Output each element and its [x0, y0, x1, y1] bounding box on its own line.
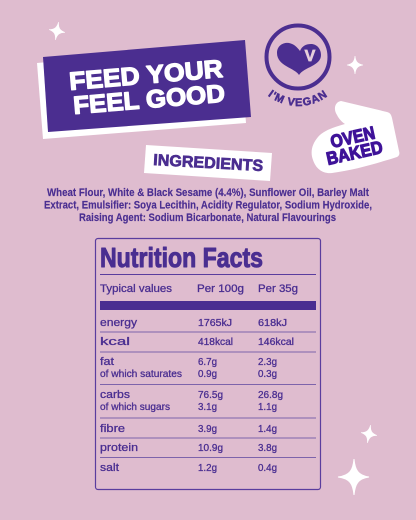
- row: carbs: 1.1g: [258, 402, 277, 413]
- headline text: FEED YOUR: [68, 55, 224, 96]
- header bar: [100, 301, 316, 310]
- ingredients list: [44, 187, 372, 224]
- headline text: [68, 55, 226, 120]
- row: salt: [100, 462, 277, 474]
- row: kcal: [100, 336, 294, 348]
- row: carbs: carbs: [100, 389, 131, 401]
- column headers: Per 100g: [197, 283, 244, 295]
- row: kcal: 418kcal: [198, 337, 233, 348]
- badge ring: [266, 26, 330, 88]
- row: salt: 1.2g: [198, 463, 217, 474]
- row: fat: fat: [100, 356, 114, 368]
- sticker text: BAKED: [325, 137, 385, 169]
- row: salt: salt: [100, 462, 119, 474]
- row: carbs: of which sugars: [100, 402, 170, 413]
- ingredients list: Raising Agent: Sodium Bicarbonate, Natural Flavourings: [79, 212, 336, 224]
- row: salt: 0.4g: [258, 463, 277, 474]
- ingredients heading: [144, 145, 272, 181]
- row: fat: 2.3g: [258, 357, 277, 368]
- sparkle lower large: [338, 459, 369, 495]
- row: protein: 3.8g: [258, 443, 277, 454]
- sticker text: OVEN: [329, 123, 377, 152]
- oven mitt sticker: [312, 101, 399, 173]
- row: fat: 0.3g: [258, 369, 277, 380]
- row: fibre: 1.4g: [258, 424, 277, 435]
- row: carbs: 3.1g: [198, 402, 217, 413]
- row: fat: 0.9g: [198, 369, 217, 380]
- nutrition title: Nutrition Facts: [100, 242, 263, 273]
- panel border: [96, 238, 320, 490]
- heading text: INGREDIENTS: [153, 152, 264, 175]
- sticker text: [325, 123, 385, 169]
- row: kcal: kcal: [100, 336, 130, 348]
- row: energy: [100, 317, 287, 329]
- headline text: FEEL GOOD: [72, 80, 226, 120]
- mitt shape: [312, 101, 399, 173]
- row: fat: [100, 356, 277, 380]
- row: carbs: [100, 389, 283, 413]
- row: protein: [100, 442, 277, 454]
- banner shadow: [37, 45, 246, 139]
- row: fat: of which saturates: [100, 369, 182, 380]
- column headers: Per 35g: [258, 283, 298, 295]
- ingredients list: Wheat Flour, White & Black Sesame (4.4%), Sunflower Oil, Barley Malt: [47, 187, 369, 199]
- sparkle top right: [347, 56, 363, 74]
- column headers: [100, 283, 298, 295]
- row: fibre: [100, 423, 277, 435]
- column headers: Typical values: [100, 283, 173, 295]
- row: fibre: 3.9g: [198, 424, 217, 435]
- row: energy: energy: [100, 317, 138, 329]
- vegan badge: [264, 24, 332, 106]
- row: carbs: 76.5g: [198, 390, 223, 401]
- row: protein: 10.9g: [198, 443, 223, 454]
- row: kcal: 146kcal: [258, 337, 294, 348]
- ingredients list: Extract, Emulsifier: Soya Lecithin, Acidity Regulator, Sodium Hydroxide,: [44, 200, 372, 212]
- badge caption: I'M VEGAN: [268, 90, 328, 106]
- row: fibre: fibre: [100, 423, 125, 435]
- sparkle top left: [48, 21, 66, 41]
- sparkle lower small: [360, 424, 378, 444]
- row: carbs: 26.8g: [258, 390, 283, 401]
- letter V: V: [305, 48, 316, 65]
- heading label: [144, 145, 272, 181]
- panel: nutrition facts: [96, 238, 320, 490]
- row: fat: 6.7g: [198, 357, 217, 368]
- banner panel: [43, 40, 251, 132]
- row: protein: protein: [100, 442, 138, 454]
- row: energy: 618kJ: [258, 318, 287, 329]
- row: energy: 1765kJ: [198, 318, 232, 329]
- icon: heart: [277, 43, 321, 75]
- headline banner: [37, 40, 251, 139]
